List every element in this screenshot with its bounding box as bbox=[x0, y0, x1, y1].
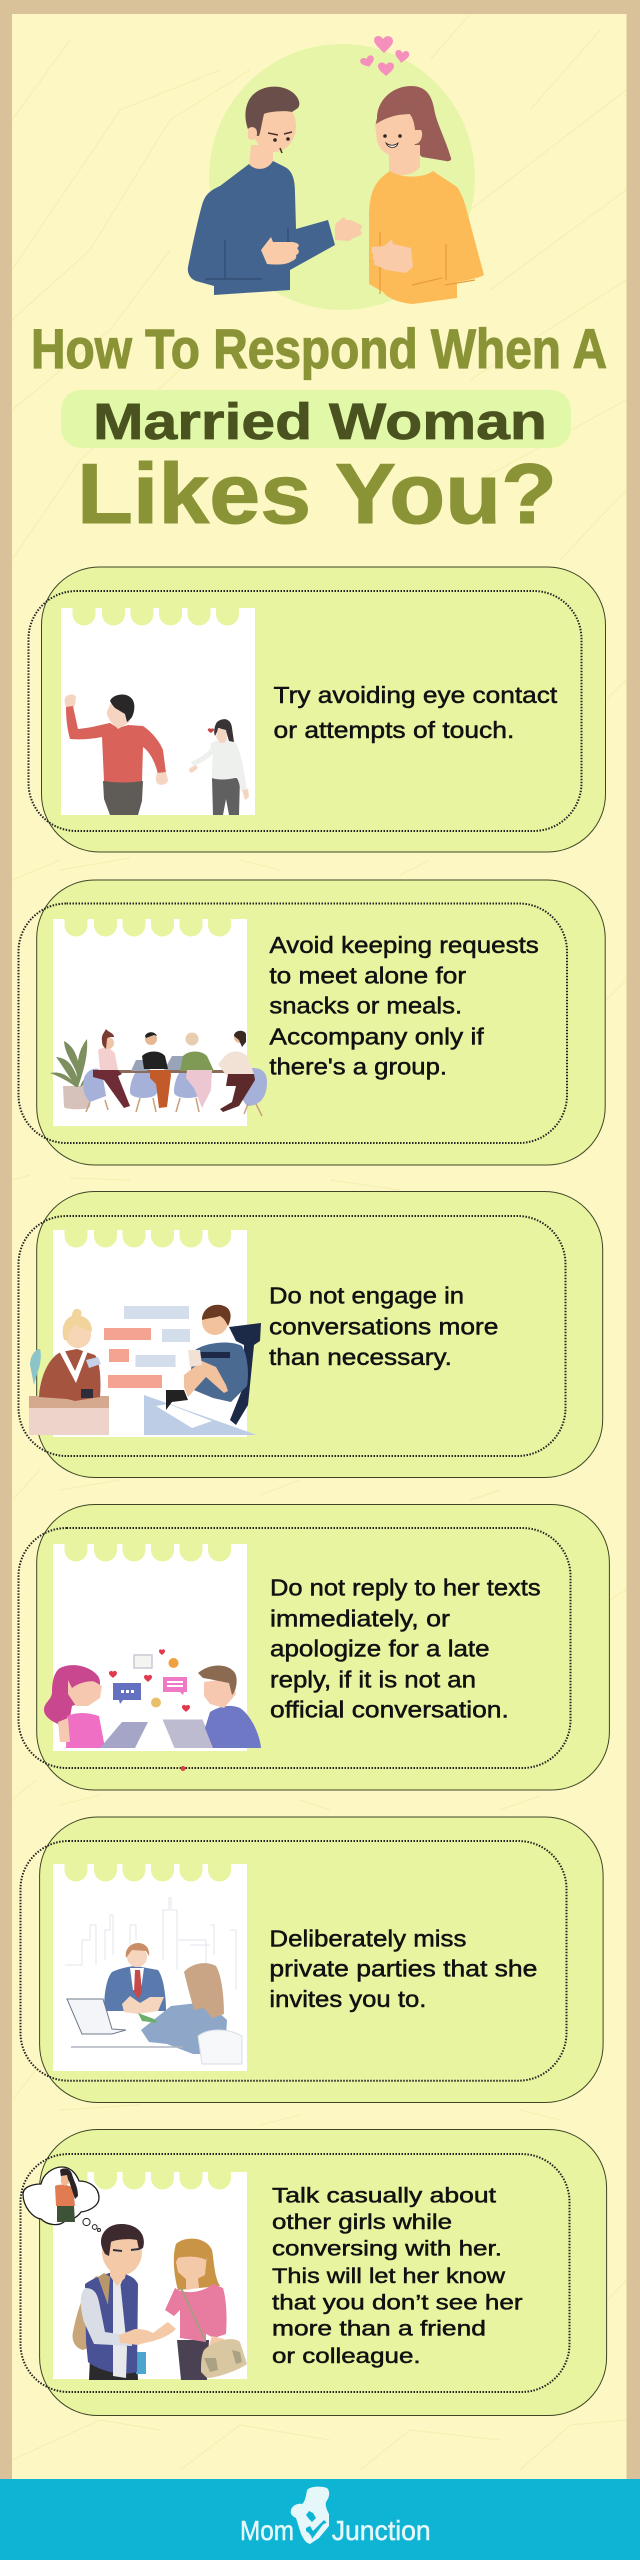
tip text bbox=[274, 682, 558, 743]
woman in bubble bbox=[55, 2168, 78, 2222]
photo note bbox=[53, 919, 247, 1126]
tip text: invites you to. bbox=[269, 1986, 426, 2012]
tip text bbox=[269, 1925, 537, 2012]
tip text: This will let her know bbox=[272, 2265, 506, 2288]
tip text bbox=[270, 1574, 541, 1723]
tip text: other girls while bbox=[272, 2211, 452, 2234]
card bbox=[40, 1817, 603, 2102]
tip text: Deliberately miss bbox=[269, 1925, 466, 1951]
tip text: official conversation. bbox=[270, 1697, 509, 1723]
card bbox=[37, 1504, 609, 1790]
panel: tip 4 bbox=[18, 1504, 609, 1790]
illustration: group at table bbox=[50, 1029, 267, 1116]
card bbox=[37, 880, 605, 1165]
panel: tip 2 bbox=[18, 880, 605, 1165]
photo note bbox=[53, 1230, 247, 1437]
red dot bbox=[180, 1766, 186, 1771]
panel: tip 6 bbox=[20, 2130, 607, 2416]
dotted outline bbox=[18, 904, 567, 1143]
man bbox=[188, 87, 362, 295]
tip text: there's a group. bbox=[269, 1054, 447, 1080]
card bbox=[42, 567, 606, 852]
tip text: that you don’t see her bbox=[272, 2291, 523, 2314]
illustration: couple chatting on laptops bbox=[44, 1649, 261, 1748]
tip text: Do not engage in bbox=[269, 1283, 464, 1309]
green blob bbox=[209, 44, 475, 310]
dotted outline bbox=[18, 1216, 566, 1456]
title bbox=[31, 317, 607, 542]
illustration: two people texting bbox=[29, 1305, 261, 1435]
photo note bbox=[53, 1544, 247, 1751]
card bbox=[37, 1192, 603, 1478]
tip text: conversations more bbox=[269, 1313, 498, 1339]
tip text: private parties that she bbox=[269, 1955, 537, 1981]
tip text: more than a friend bbox=[272, 2318, 486, 2341]
panel: tip 5 bbox=[20, 1817, 603, 2102]
tip text: Do not reply to her texts bbox=[270, 1574, 541, 1600]
tip text: Talk casually about bbox=[272, 2184, 496, 2207]
dotted outline bbox=[20, 1841, 566, 2081]
title line 3: Likes You? bbox=[77, 447, 557, 542]
title pill bbox=[61, 390, 571, 448]
panel: tip 3 bbox=[18, 1192, 603, 1478]
woman bbox=[369, 86, 484, 304]
photo note bbox=[53, 2172, 247, 2379]
photo note bbox=[53, 1864, 247, 2071]
footer band bbox=[0, 2479, 640, 2560]
tip text bbox=[269, 1283, 498, 1370]
tip text: conversing with her. bbox=[272, 2238, 502, 2261]
logo: MomJunction bbox=[240, 2487, 431, 2546]
dotted outline bbox=[18, 1528, 570, 1768]
tip text: immediately, or bbox=[270, 1606, 450, 1632]
illustration: man and woman shaking hands bbox=[72, 2224, 247, 2380]
tip text: to meet alone for bbox=[269, 962, 466, 988]
logo: MomJunction: Mom bbox=[240, 2515, 294, 2546]
panel: tip 1 bbox=[28, 567, 606, 852]
tip text: reply, if it is not an bbox=[270, 1666, 476, 1692]
tip text: Try avoiding eye contact bbox=[274, 682, 558, 708]
tip text: than necessary. bbox=[269, 1344, 452, 1370]
illustration: man walking away from woman bbox=[65, 694, 249, 815]
dotted outline bbox=[20, 2154, 570, 2392]
logo: MomJunction: Junction bbox=[332, 2515, 431, 2546]
title line 2: Married Woman bbox=[93, 393, 547, 450]
tip text: snacks or meals. bbox=[269, 993, 462, 1019]
thought bubble bbox=[23, 2167, 100, 2232]
photo note bbox=[61, 608, 255, 815]
tip text: or colleague. bbox=[272, 2345, 421, 2368]
dotted outline bbox=[28, 591, 582, 831]
tip text bbox=[272, 2184, 523, 2368]
illustration: office meeting bbox=[65, 1898, 242, 2064]
card bbox=[40, 2130, 607, 2416]
icon: hearts bbox=[359, 36, 410, 76]
header illustration: couple talking bbox=[188, 36, 484, 310]
logo icon bbox=[291, 2487, 329, 2544]
tip text: Accompany only if bbox=[269, 1024, 484, 1050]
tip text: Avoid keeping requests bbox=[269, 932, 539, 958]
tip text: apologize for a late bbox=[270, 1636, 490, 1662]
tip text bbox=[269, 932, 539, 1080]
tip text: or attempts of touch. bbox=[274, 717, 514, 743]
